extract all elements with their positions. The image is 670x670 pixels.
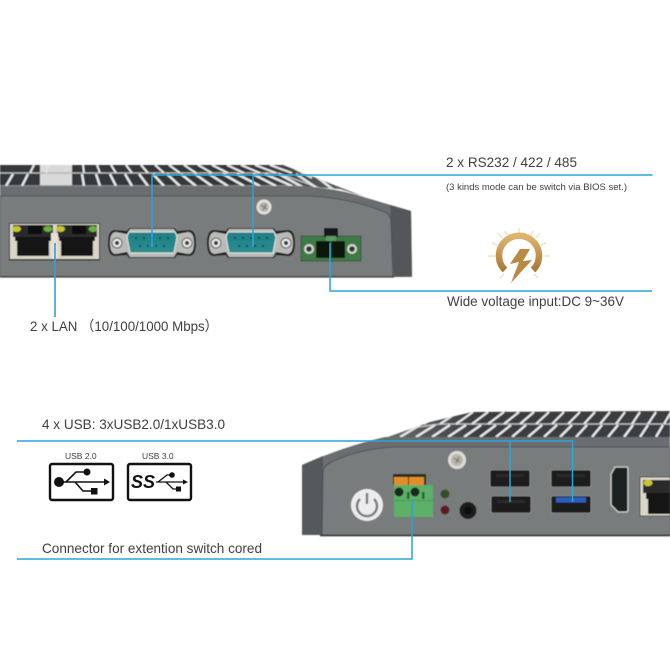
front chassis screw: [448, 451, 466, 469]
icon: USB 2.0: USB 2.0: [65, 451, 97, 461]
USB 2.0 port, top right: [551, 470, 591, 487]
power connector: [301, 228, 361, 261]
heading: USB: 4 x USB: 3xUSB2.0/1xUSB3.0: [42, 416, 225, 432]
device: rear panel photo: [0, 160, 412, 278]
side face, rear: [390, 205, 412, 277]
callout line: power input: [330, 243, 652, 291]
heading: switch connector: Connector for extention switch cored: [42, 540, 262, 556]
audio jack: [460, 502, 476, 519]
infographic canvas: [0, 157, 670, 560]
serial port 1: [108, 228, 196, 258]
LAN port, front: [640, 477, 670, 516]
LAN ports: [9, 223, 100, 260]
power button: [351, 489, 383, 521]
heading: wide voltage input: Wide voltage input:DC 9~36V: [447, 293, 625, 309]
chassis screw, rear: [256, 200, 272, 214]
chassis, rear: [0, 186, 412, 277]
front plate, front: [322, 447, 670, 535]
icon: wide voltage lightning gauge: [488, 228, 550, 283]
callout lines: RS232: [152, 175, 652, 247]
device: front panel photo: [302, 408, 670, 536]
serial port 2: [207, 228, 295, 258]
note: BIOS mode: (3 kinds mode can be switch via BIOS set.): [446, 181, 627, 192]
front plate, rear: [0, 196, 393, 277]
icon: USB 3.0 SuperSpeed: USB 3.0: [142, 451, 174, 461]
heading: LAN: 2 x LAN （10/100/1000 Mbps）: [30, 318, 218, 334]
icon: USB 2.0: [50, 451, 113, 500]
USB 2.0 port, top left: [490, 470, 530, 487]
switch connector: [393, 474, 433, 517]
heatsink fins, front: [388, 410, 670, 438]
heading: RS232: 2 x RS232 / 422 / 485: [446, 154, 577, 170]
HDMI port: [611, 467, 628, 512]
callout line: LAN: [54, 243, 56, 317]
USB 3.0 port: [551, 496, 591, 513]
callout lines: USB: [17, 441, 572, 502]
icon: USB 3.0 SuperSpeed: [128, 451, 191, 500]
heatsink fins, rear: [0, 164, 364, 197]
chassis, front: [302, 437, 670, 535]
callout line: switch connector: [17, 500, 412, 559]
side face, front: [302, 456, 323, 535]
icon: USB 3.0 SuperSpeed: SS: [131, 472, 155, 492]
status LEDs: [440, 490, 450, 514]
USB 2.0 port, bottom left: [491, 496, 531, 513]
